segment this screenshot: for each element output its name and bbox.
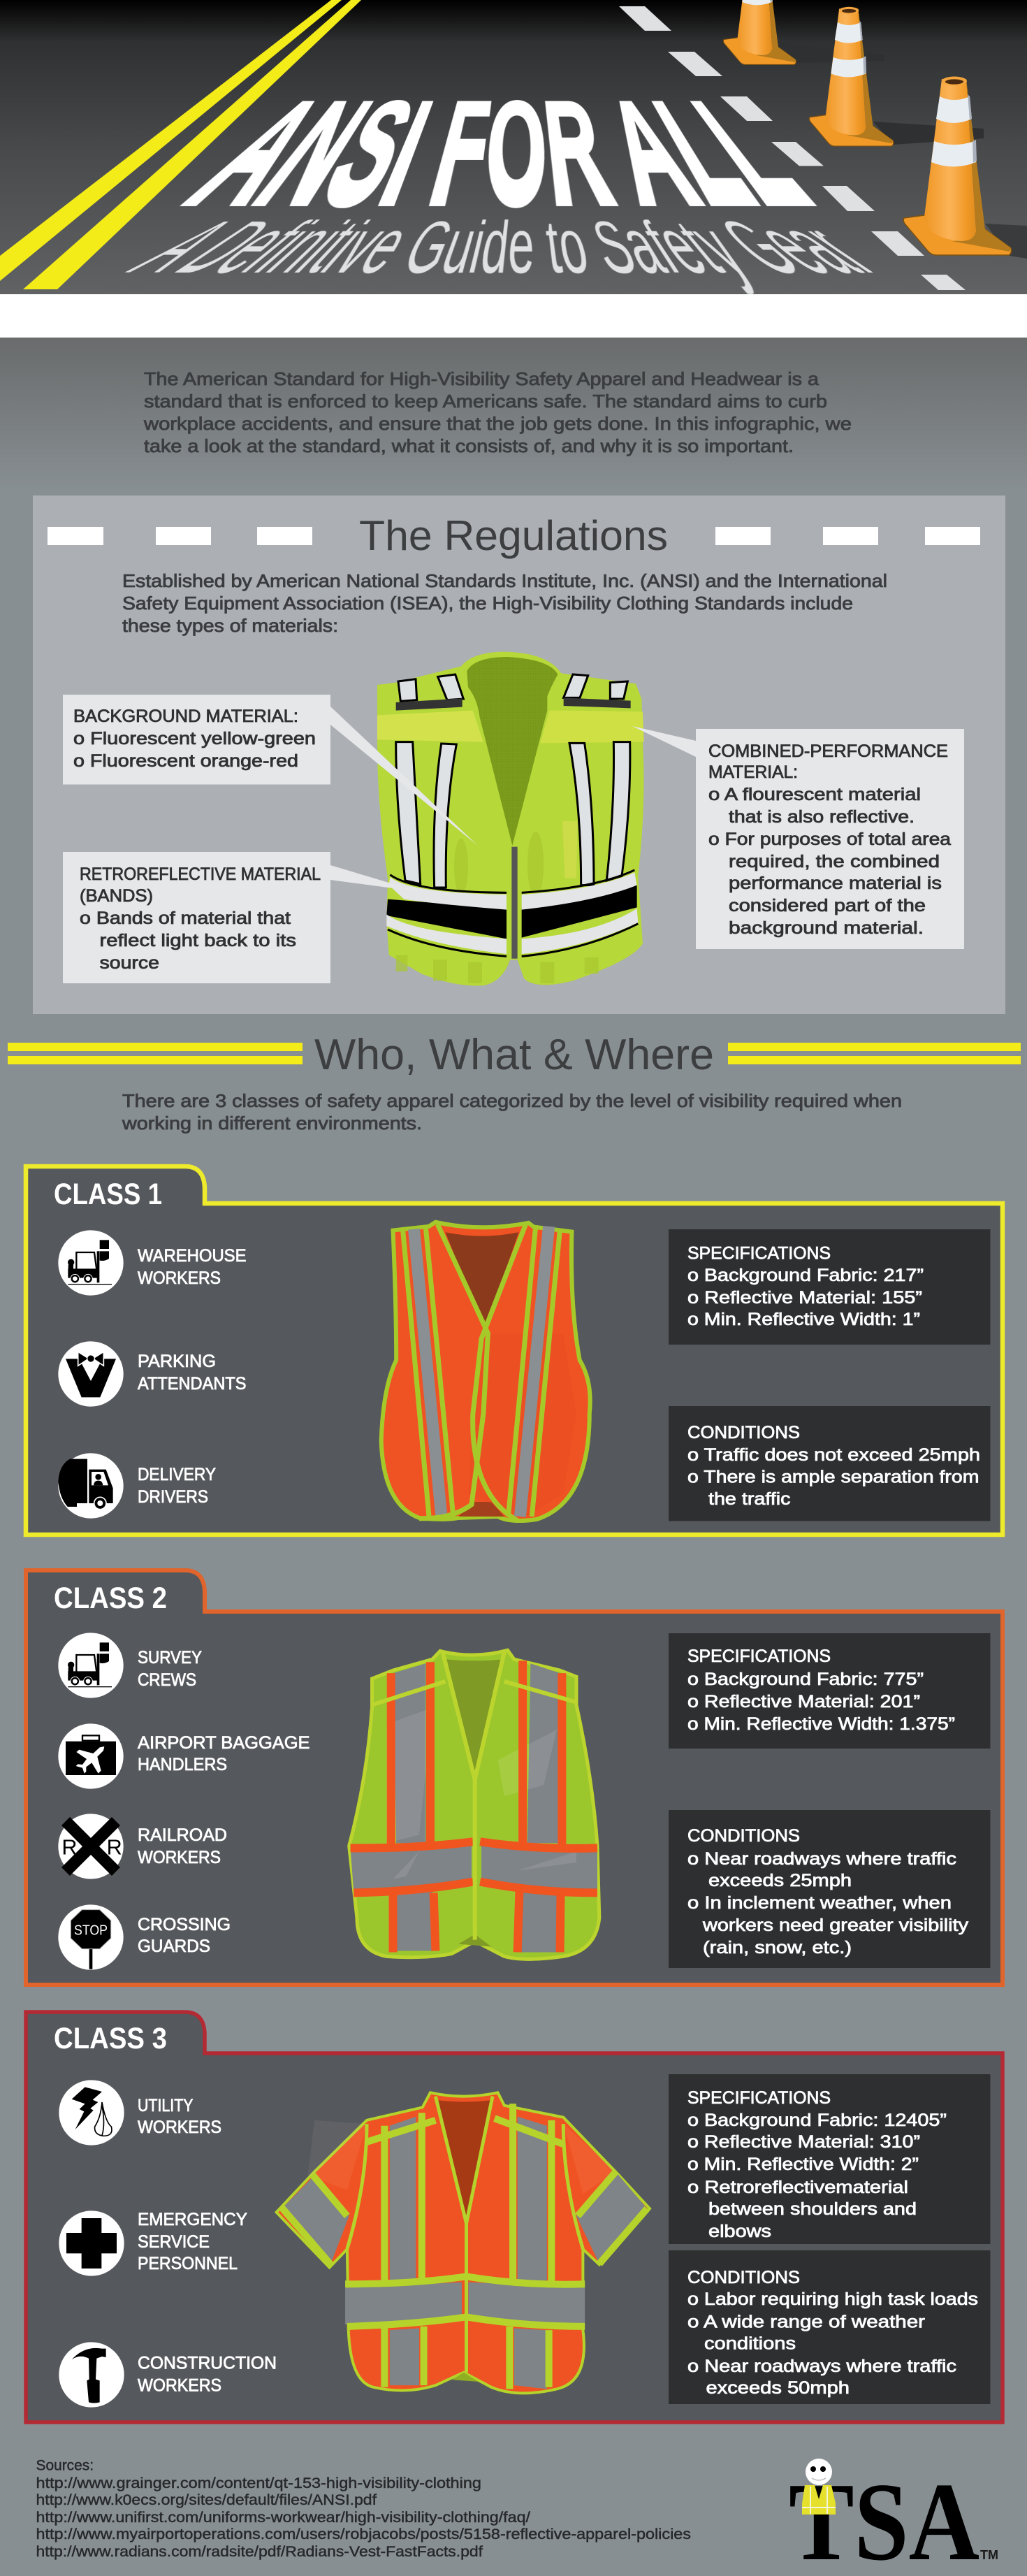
utility workers label: WORKERS bbox=[138, 2118, 221, 2137]
class 1 specifications box: SPECIFICATIONS bbox=[687, 1244, 831, 1264]
regulations paragraph bbox=[122, 570, 887, 636]
class 3 conditions box bbox=[669, 2250, 991, 2404]
crossing guards label: CROSSING bbox=[138, 1915, 231, 1934]
class 3 specifications box bbox=[669, 2074, 991, 2244]
class 2 conditions box: exceeds 25mph bbox=[708, 1871, 852, 1890]
class 2 conditions box: (rain, snow, etc.) bbox=[703, 1938, 852, 1958]
callout: combined-performance material: o A flourescent material bbox=[708, 785, 921, 804]
regulations paragraph: Established by American National Standards Institute, Inc. (ANSI) and the International bbox=[122, 570, 887, 591]
delivery drivers label: DELIVERY bbox=[138, 1465, 216, 1484]
classes paragraph: working in different environments. bbox=[122, 1113, 422, 1134]
class 1 label: CLASS 1 bbox=[54, 1178, 162, 1211]
icon: railroad crossing: R bbox=[61, 1835, 77, 1859]
delivery drivers label bbox=[138, 1465, 216, 1507]
class 2 specifications box bbox=[669, 1633, 991, 1749]
crossing guards label: GUARDS bbox=[138, 1937, 210, 1956]
class 1 conditions box: o There is ample separation from bbox=[687, 1468, 979, 1487]
callout: combined-performance material: considered part of the bbox=[729, 896, 926, 916]
emergency service personnel label: PERSONNEL bbox=[138, 2254, 238, 2273]
callout: background material: BACKGROUND MATERIAL: bbox=[73, 707, 298, 726]
icon: hammer bbox=[59, 2342, 124, 2408]
sources list: http://www.radians.com/radsite/pdf/Radians-Vest-FastFacts.pdf bbox=[36, 2544, 483, 2560]
railroad workers label bbox=[138, 1825, 227, 1867]
class 2 conditions box: workers need greater visibility bbox=[702, 1916, 969, 1935]
icon: airplane suitcase bbox=[58, 1723, 124, 1789]
utility workers label bbox=[138, 2096, 221, 2137]
emergency service personnel label bbox=[138, 2210, 247, 2273]
double yellow lines bbox=[0, 0, 361, 289]
panel: the regulations bbox=[33, 495, 1005, 1014]
class 1 conditions box bbox=[669, 1406, 991, 1521]
callout: retroreflective material: RETROREFLECTIVE MATERIAL bbox=[80, 864, 321, 884]
white band under header bbox=[0, 294, 1027, 338]
parking attendants label: PARKING bbox=[138, 1352, 216, 1371]
class 2 specifications box: SPECIFICATIONS bbox=[687, 1647, 831, 1666]
construction workers label: CONSTRUCTION bbox=[138, 2354, 277, 2373]
railroad workers label: WORKERS bbox=[138, 1848, 221, 1867]
callout: combined-performance material: required, the combined bbox=[729, 852, 940, 871]
class 3 sleeved vest bbox=[277, 2092, 650, 2393]
survey crews label bbox=[138, 1648, 202, 1690]
callout: combined-performance material: o For purposes of total area bbox=[708, 830, 951, 849]
class 3 conditions box: exceeds 50mph bbox=[706, 2378, 850, 2398]
warehouse workers label: WAREHOUSE bbox=[138, 1246, 246, 1266]
class 3 conditions box: conditions bbox=[704, 2334, 796, 2354]
callout: background material: o Fluorescent yellow-green bbox=[73, 729, 316, 748]
callout: combined-performance material: that is also reflective. bbox=[729, 807, 915, 827]
utility workers label: UTILITY bbox=[138, 2096, 194, 2115]
warehouse workers label bbox=[138, 1246, 246, 1288]
pointer triangles bbox=[330, 707, 696, 892]
class 3 conditions box: CONDITIONS bbox=[687, 2268, 800, 2287]
class 2 conditions box: o Near roadways where traffic bbox=[687, 1849, 956, 1869]
emergency service personnel label: SERVICE bbox=[138, 2232, 210, 2252]
intro paragraph: The American Standard for High-Visibility Safety Apparel and Headwear is a bbox=[144, 368, 820, 389]
class 3 label: CLASS 3 bbox=[54, 2022, 167, 2055]
icon: medical cross bbox=[59, 2210, 124, 2276]
airport baggage handlers label: AIRPORT BAGGAGE bbox=[138, 1733, 310, 1753]
parking attendants label bbox=[138, 1352, 246, 1394]
construction workers label: WORKERS bbox=[138, 2376, 221, 2396]
regulations paragraph: these types of materials: bbox=[122, 615, 338, 636]
class 3 specifications box: o Reflective Material: 310” bbox=[687, 2132, 920, 2152]
classes paragraph: There are 3 classes of safety apparel categorized by the level of visibility required when bbox=[122, 1090, 902, 1111]
traffic cone middle bbox=[809, 7, 984, 146]
class 1 orange vest bbox=[381, 1222, 590, 1521]
class 1 conditions box: o Traffic does not exceed 25mph bbox=[687, 1445, 980, 1465]
class 2 specifications box: o Min. Reflective Width: 1.375” bbox=[687, 1714, 955, 1734]
icon: forklift bbox=[58, 1230, 124, 1296]
emergency service personnel label: EMERGENCY bbox=[138, 2210, 247, 2229]
road dashes beside heading bbox=[48, 527, 980, 545]
regulations paragraph: Safety Equipment Association (ISEA), the High-Visibility Clothing Standards include bbox=[122, 593, 853, 614]
logo mascot vest bbox=[802, 2485, 836, 2515]
header road scene bbox=[0, 0, 1027, 294]
airport baggage handlers label: HANDLERS bbox=[138, 1755, 227, 1774]
traffic cone near bbox=[903, 77, 1027, 259]
railroad workers label: RAILROAD bbox=[138, 1825, 227, 1845]
crossing guards label bbox=[138, 1915, 231, 1956]
construction workers label bbox=[138, 2354, 277, 2396]
icon: tuxedo bow tie bbox=[58, 1341, 124, 1407]
airport baggage handlers label bbox=[138, 1733, 310, 1774]
hi-vis vest illustration bbox=[377, 652, 644, 985]
class 3 specifications box: o Background Fabric: 12405” bbox=[687, 2111, 947, 2130]
class 2 specifications box: o Reflective Material: 201” bbox=[687, 1692, 920, 1712]
callout: combined-performance material: performance material is bbox=[729, 874, 942, 893]
class 3 specifications box: elbows bbox=[708, 2222, 771, 2241]
TSA logo: TM bbox=[980, 2548, 998, 2562]
callout: combined-performance material: background material. bbox=[729, 918, 924, 938]
class 1 specifications box: o Reflective Material: 155” bbox=[687, 1288, 922, 1308]
panel: class 1 bbox=[26, 1166, 1003, 1535]
class 3 specifications box: o Min. Reflective Width: 2” bbox=[687, 2155, 919, 2174]
class 3 specifications box: o Retroreflectivematerial bbox=[687, 2178, 908, 2197]
dashed lane marks bbox=[619, 6, 966, 290]
logo mascot head bbox=[806, 2459, 832, 2485]
panel: class 3 bbox=[26, 2012, 1003, 2422]
callout: background material bbox=[63, 695, 330, 784]
class 1 specifications box: o Min. Reflective Width: 1” bbox=[687, 1310, 920, 1329]
callout: retroreflective material bbox=[63, 852, 330, 983]
class 3 conditions box: o Near roadways where traffic bbox=[687, 2357, 956, 2376]
callout: retroreflective material: source bbox=[99, 953, 159, 973]
icon: stop sign: STOP bbox=[74, 1923, 108, 1939]
section heading: who, what and where bbox=[8, 1031, 1021, 1079]
icon: lightning and water drop bbox=[59, 2080, 124, 2146]
page gradient background bbox=[0, 338, 1027, 493]
class 1 specifications box: o Background Fabric: 217” bbox=[687, 1266, 924, 1285]
intro paragraph: workplace accidents, and ensure that the job gets done. In this infographic, we bbox=[143, 413, 852, 434]
sources list: http://www.grainger.com/content/qt-153-high-visibility-clothing bbox=[36, 2475, 481, 2491]
classes paragraph bbox=[122, 1090, 902, 1134]
class 2 label: CLASS 2 bbox=[54, 1582, 167, 1615]
class 3 specifications box: SPECIFICATIONS bbox=[687, 2088, 831, 2108]
intro paragraph bbox=[143, 368, 852, 456]
sources list: http://www.unifirst.com/uniforms-workwear/high-visibility-clothing/faq/ bbox=[36, 2510, 530, 2526]
callout: combined-performance material bbox=[696, 729, 964, 949]
icon: railroad crossing bbox=[58, 1814, 124, 1879]
icon: survey forklift bbox=[58, 1633, 124, 1698]
parking attendants label: ATTENDANTS bbox=[138, 1374, 246, 1394]
callout: retroreflective material: (BANDS) bbox=[80, 886, 153, 906]
sources list: http://www.myairportoperations.com/users/robjacobs/posts/5158-reflective-apparel-policies bbox=[36, 2526, 691, 2542]
survey crews label: SURVEY bbox=[138, 1648, 202, 1667]
class 2 conditions box: o In inclement weather, when bbox=[687, 1893, 952, 1913]
callout: retroreflective material: o Bands of material that bbox=[80, 909, 291, 928]
callout: combined-performance material: MATERIAL: bbox=[708, 762, 798, 782]
traffic cone far bbox=[723, 0, 884, 64]
icon: stop sign bbox=[58, 1904, 124, 1970]
panel: class 2 bbox=[26, 1570, 1003, 1985]
intro paragraph: standard that is enforced to keep Americans safe. The standard aims to curb bbox=[144, 391, 827, 412]
class 3 conditions box: o Labor requiring high task loads bbox=[687, 2289, 978, 2309]
class 1 specifications box bbox=[669, 1229, 991, 1345]
callout: background material: o Fluorescent orange-red bbox=[73, 751, 298, 771]
sources list: Sources: bbox=[36, 2457, 94, 2474]
sources list: http://www.k0ecs.org/sites/default/files/ANSI.pdf bbox=[36, 2492, 377, 2508]
sources list bbox=[36, 2457, 691, 2560]
callout: retroreflective material: reflect light back to its bbox=[99, 931, 296, 950]
class 1 conditions box: CONDITIONS bbox=[687, 1423, 800, 1442]
class 2 specifications box: o Background Fabric: 775” bbox=[687, 1670, 924, 1689]
class 3 specifications box: between shoulders and bbox=[708, 2199, 917, 2219]
class 3 conditions box: o A wide range of weather bbox=[687, 2312, 925, 2331]
class 2 lime vest bbox=[349, 1650, 599, 1959]
icon: railroad crossing: R bbox=[107, 1835, 122, 1859]
class 2 conditions box bbox=[669, 1810, 991, 1968]
callout: combined-performance material: COMBINED-PERFORMANCE bbox=[708, 741, 948, 761]
class 2 conditions box: CONDITIONS bbox=[687, 1826, 800, 1846]
warehouse workers label: WORKERS bbox=[138, 1268, 221, 1288]
icon: delivery truck bbox=[58, 1453, 124, 1519]
class 1 conditions box: the traffic bbox=[708, 1489, 791, 1509]
survey crews label: CREWS bbox=[138, 1670, 196, 1690]
heading: the regulations: The Regulations bbox=[359, 512, 668, 559]
intro paragraph: take a look at the standard, what it consists of, and why it is so important. bbox=[144, 435, 794, 456]
section heading: who, what and where: Who, What & Where bbox=[314, 1031, 714, 1079]
delivery drivers label: DRIVERS bbox=[138, 1487, 208, 1507]
